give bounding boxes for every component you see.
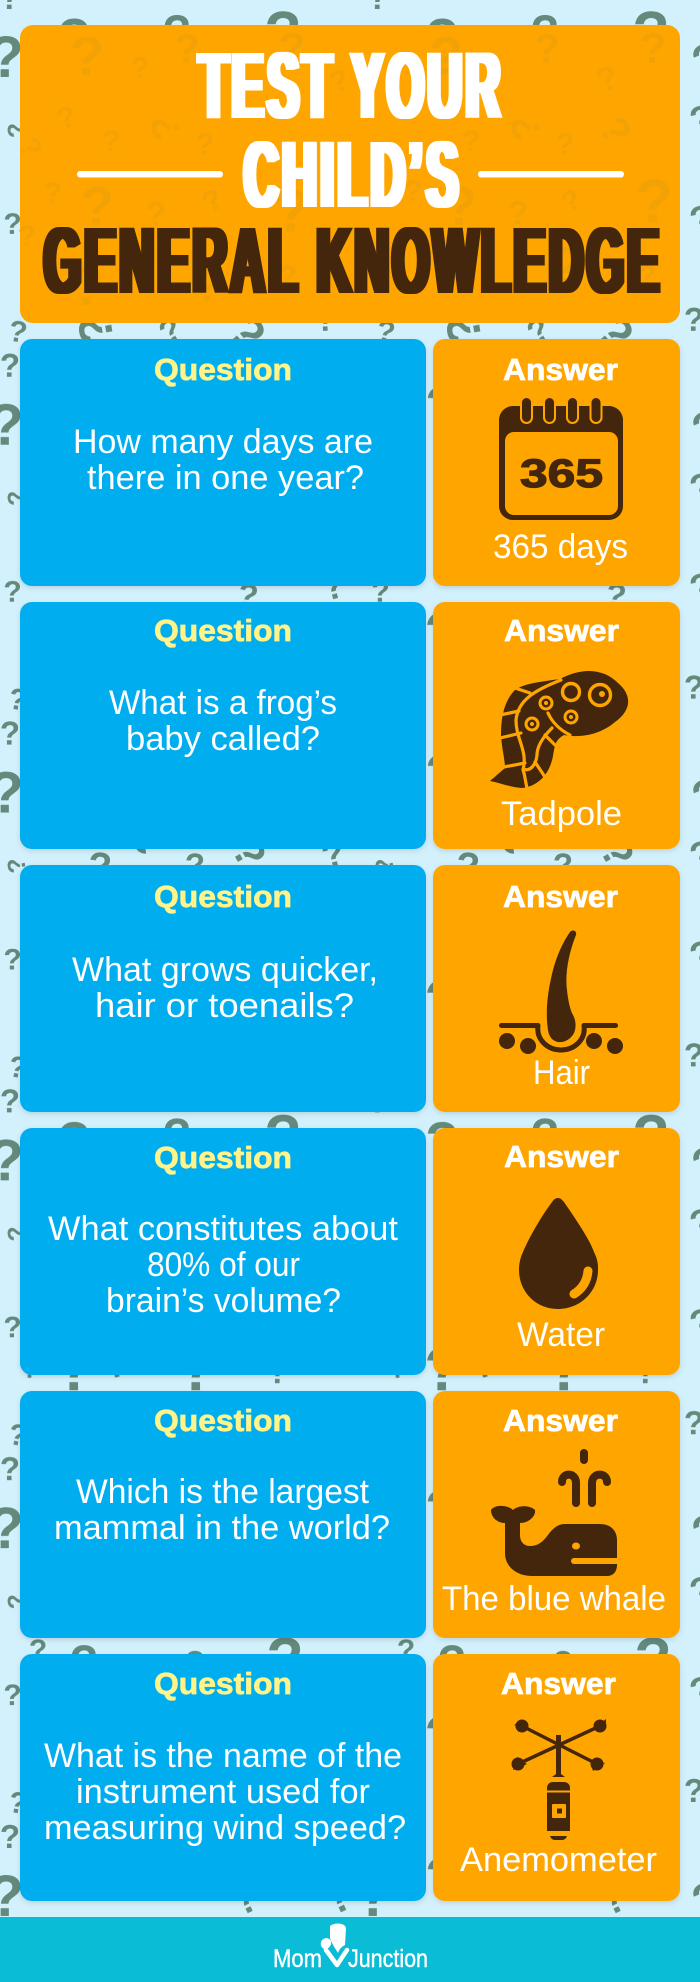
question heading: Question (154, 879, 292, 914)
panel: title: ? (131, 52, 149, 85)
panel: title: ? (146, 195, 166, 233)
panel: answer 2 (433, 602, 680, 849)
answer text: The blue whale (442, 1580, 666, 1618)
panel: title: ? (194, 260, 222, 311)
panel: answer 6 (433, 1654, 680, 1901)
panel: title: ? (80, 175, 114, 237)
panel: title: ? (443, 175, 477, 237)
panel: title: ? (555, 182, 588, 220)
question text: 80% of our (147, 1246, 300, 1284)
panel: title: ? (174, 25, 200, 72)
panel: title: ? (274, 178, 310, 245)
question text: What grows quicker, (72, 951, 378, 989)
question text (73, 423, 373, 497)
panel: title: ? (404, 175, 422, 208)
question text (72, 951, 378, 1025)
question text (109, 684, 337, 758)
question text: baby called? (126, 720, 320, 758)
panel: answer 5 (433, 1391, 680, 1638)
logo icon: mother and child (321, 1924, 347, 1965)
panel: answer 4 (433, 1128, 680, 1375)
icon: anemometer (512, 1719, 606, 1840)
panel: title: ? (279, 260, 297, 293)
answer text: Water (517, 1316, 605, 1354)
panel: title: ? (52, 100, 81, 137)
panel: title: ? (102, 125, 120, 158)
answer heading: Answer (503, 879, 618, 914)
panel: title: ? (11, 131, 49, 164)
question text: instrument used for (76, 1773, 370, 1811)
panel: title: ? (638, 260, 656, 293)
question text: brain’s volume? (106, 1282, 341, 1320)
icon: tadpole (490, 671, 628, 788)
panel: title: ? (18, 220, 36, 253)
panel: title: ? (640, 24, 666, 73)
question heading: Question (154, 1666, 292, 1701)
answer heading: Answer (503, 1403, 618, 1438)
panel: question 1 (20, 339, 426, 586)
icon: hair follicle (499, 931, 623, 1054)
panel: title: ? (635, 167, 673, 236)
panel: title: ? (44, 177, 62, 210)
panel: title: ? (591, 58, 624, 101)
question text (48, 1210, 399, 1320)
question text: What is the name of the (44, 1737, 402, 1775)
question text: there in one year? (87, 459, 364, 497)
panel: title: ? (462, 125, 480, 158)
panel: title: ? (70, 255, 104, 317)
panel: title: ? (534, 25, 560, 72)
answer text: 365 days (493, 528, 628, 566)
panel: title: ? (508, 194, 528, 232)
question text (54, 1473, 390, 1547)
panel: title: ? (556, 128, 574, 161)
panel: title: ? (429, 25, 463, 87)
title line: test your: TEST YOUR (199, 32, 500, 138)
answer heading: Answer (501, 1666, 616, 1701)
panel: question 2 (20, 602, 426, 849)
question text (44, 1737, 406, 1847)
question text: Which is the largest (76, 1473, 370, 1511)
question text: How many days are (73, 423, 373, 461)
panel: question 6 (20, 1654, 426, 1901)
question text: hair or toenails? (95, 987, 354, 1025)
panel: question 5 (20, 1391, 426, 1638)
question heading: Question (154, 1403, 292, 1438)
title line: child's: CHILD’S (244, 121, 458, 227)
logo wordmark: Mom: Mom (273, 1945, 322, 1973)
icon: calendar 365: 365 (520, 452, 603, 496)
icon: water drop (519, 1198, 598, 1309)
answer heading: Answer (504, 1139, 619, 1174)
panel: title: ? (590, 109, 640, 152)
answer text: Hair (533, 1054, 590, 1092)
logo wordmark: Junction: Junction (348, 1945, 428, 1973)
answer text: Tadpole (501, 795, 622, 833)
icon: calendar 365 (499, 397, 623, 520)
question heading: Question (154, 1140, 292, 1175)
panel: title: ? (325, 63, 354, 100)
answer heading: Answer (504, 613, 619, 648)
title line: general knowledge: GENERAL KNOWLEDGE (44, 207, 659, 313)
panel: title: ? (196, 182, 229, 220)
answer heading: Answer (503, 352, 618, 387)
panel: title: ? (196, 128, 214, 161)
question text: mammal in the world? (54, 1509, 390, 1547)
panel: title (11, 24, 680, 323)
left rule (77, 171, 223, 178)
icon: whale (491, 1453, 619, 1576)
right rule (478, 171, 624, 178)
panel: question 4 (20, 1128, 426, 1375)
panel: title: ? (503, 112, 550, 144)
panel: title: ? (70, 25, 104, 87)
question text: measuring wind speed? (44, 1809, 406, 1847)
panel: title: ? (279, 24, 305, 73)
question text: What is a frog’s (109, 684, 337, 722)
footer band with logo (0, 1917, 700, 1982)
panel: title: ? (143, 112, 190, 144)
panel: question 3 (20, 865, 426, 1112)
panel: answer 1 (433, 339, 680, 586)
answer text: Anemometer (460, 1841, 657, 1879)
question heading: Question (154, 613, 292, 648)
panel: answer 3 (433, 865, 680, 1112)
question heading: Question (154, 352, 292, 387)
panel: title: ? (550, 235, 584, 297)
question text: What constitutes about (48, 1210, 399, 1248)
